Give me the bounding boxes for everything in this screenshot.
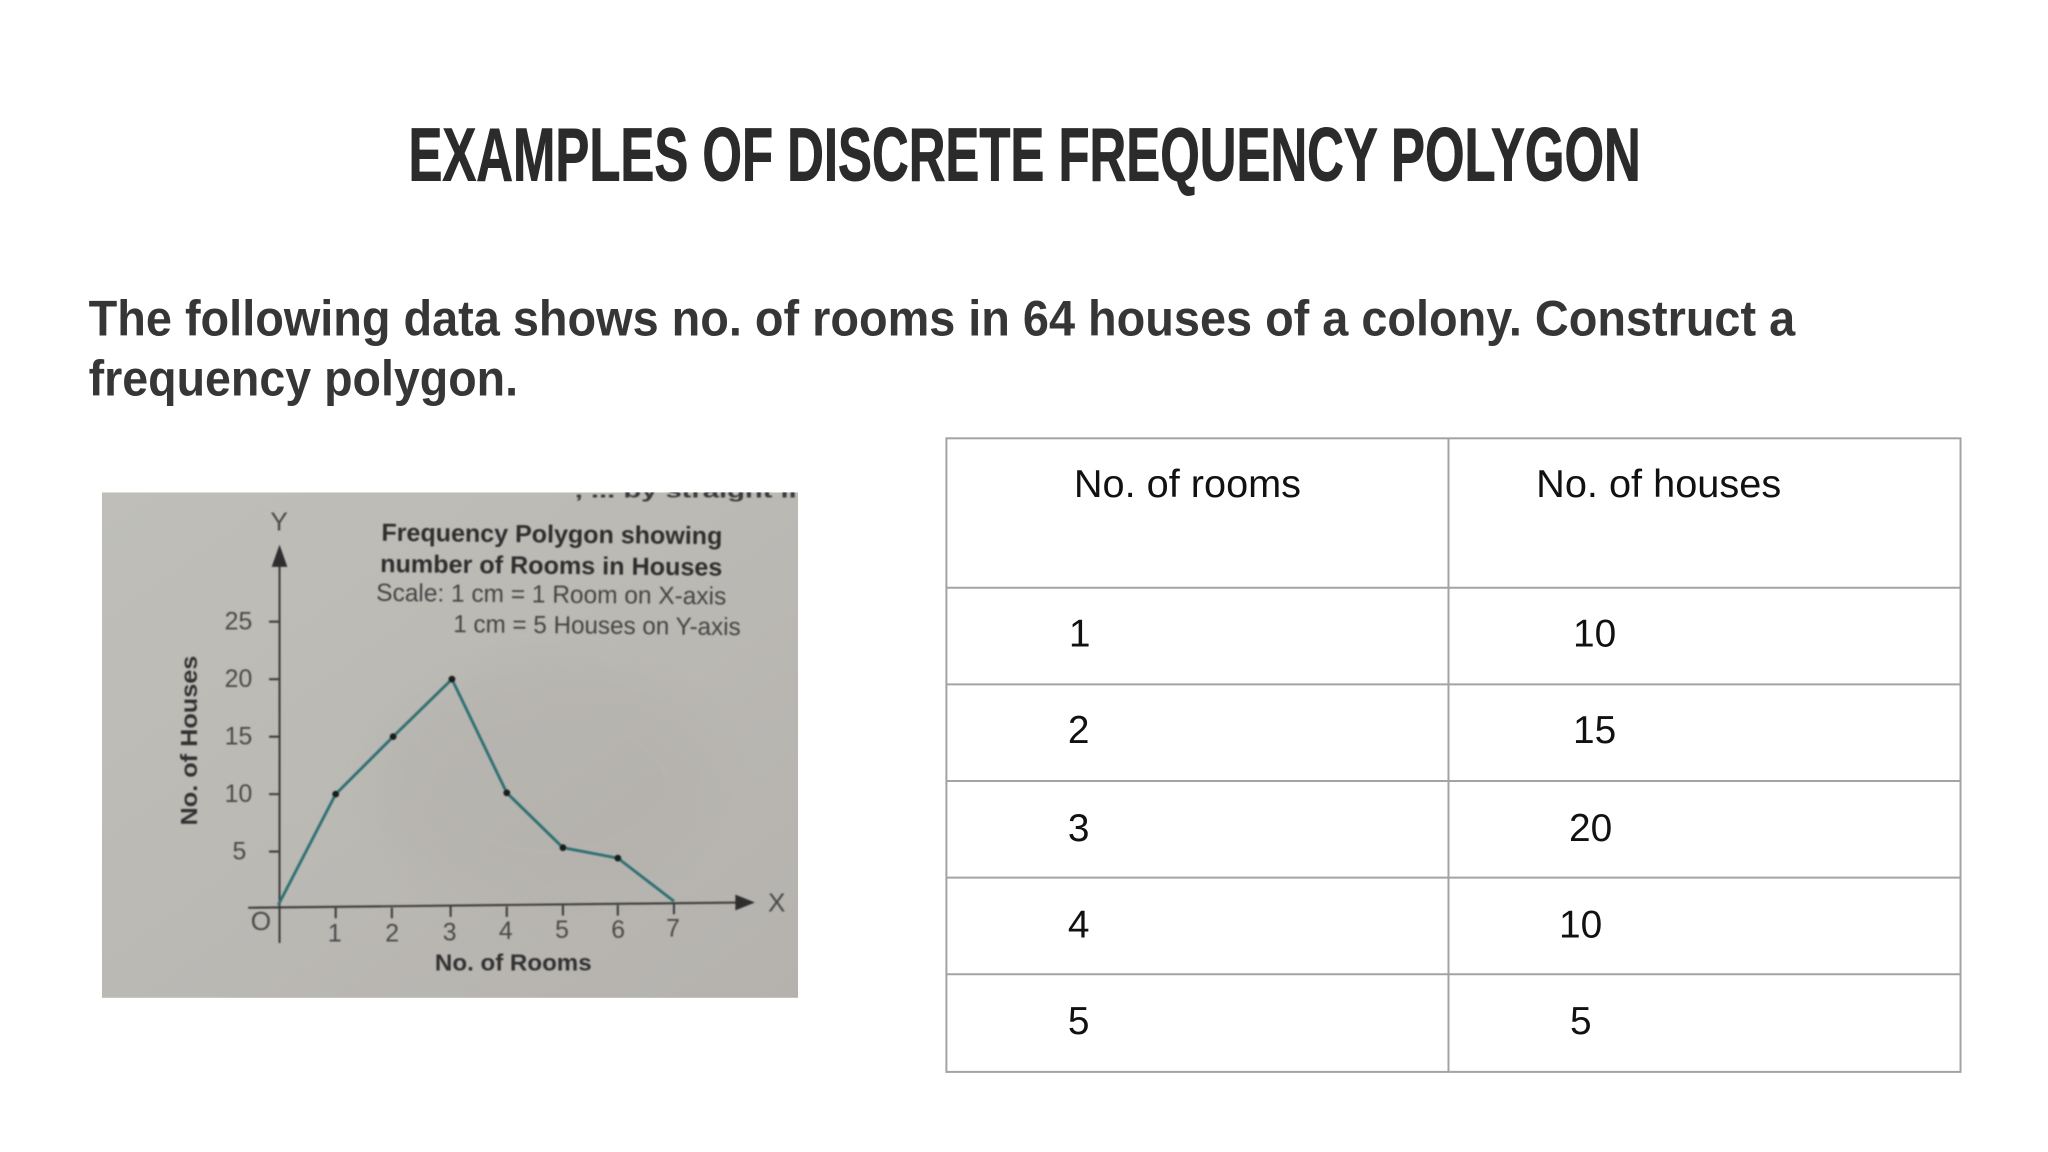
axis tick labels: O bbox=[251, 906, 271, 936]
axis tick labels: 2 bbox=[385, 921, 399, 948]
cut-off text at top of photo: , ... by straight li bbox=[575, 481, 797, 503]
axis tick labels: 3 bbox=[443, 919, 457, 946]
axis tick labels: Y bbox=[270, 506, 288, 536]
polygon line bbox=[278, 679, 674, 905]
table houses column: 5 bbox=[1570, 1000, 1592, 1043]
chart heading bbox=[376, 520, 741, 641]
table houses column bbox=[1559, 613, 1616, 1043]
axis tick labels: 5 bbox=[232, 838, 246, 865]
table rooms column bbox=[1068, 613, 1091, 1043]
chart heading: 1 cm = 5 Houses on Y-axis bbox=[453, 611, 741, 641]
photo: frequency polygon chart: No. of Houses bbox=[176, 656, 202, 825]
chart heading: number of Rooms in Houses bbox=[380, 551, 722, 582]
data table bbox=[946, 438, 1961, 1072]
axis tick labels: 4 bbox=[499, 918, 513, 945]
table houses column: 10 bbox=[1559, 903, 1602, 946]
axis titles: No. of Rooms bbox=[435, 949, 592, 975]
axis tick labels: 6 bbox=[611, 917, 625, 944]
table header row bbox=[1074, 463, 1781, 506]
table header row: No. of rooms bbox=[1074, 463, 1301, 506]
axis arrows bbox=[272, 545, 755, 910]
data points bbox=[332, 676, 621, 862]
table rooms column: 2 bbox=[1068, 709, 1090, 752]
question text bbox=[89, 291, 1796, 406]
table houses column: 10 bbox=[1573, 613, 1616, 656]
table header row: No. of houses bbox=[1536, 463, 1781, 506]
axes bbox=[248, 559, 739, 943]
table rooms column: 5 bbox=[1068, 1000, 1090, 1043]
axis tick labels: 25 bbox=[225, 609, 252, 636]
table houses column: 15 bbox=[1573, 709, 1616, 752]
question text: The following data shows no. of rooms in 64 houses of a colony. Construct a bbox=[89, 291, 1796, 347]
photo: frequency polygon chart bbox=[102, 481, 798, 998]
axis tick labels: 7 bbox=[666, 915, 680, 942]
question text: frequency polygon. bbox=[89, 350, 518, 406]
axis tick labels: 20 bbox=[225, 666, 252, 693]
axis tick labels bbox=[225, 506, 785, 948]
table rooms column: 3 bbox=[1068, 807, 1090, 850]
slide bbox=[89, 127, 1962, 1073]
chart heading: Frequency Polygon showing bbox=[381, 520, 722, 550]
chart heading: Scale: 1 cm = 1 Room on X-axis bbox=[376, 580, 726, 610]
axis tick labels: 10 bbox=[225, 781, 252, 808]
table rooms column: 4 bbox=[1068, 903, 1090, 946]
axis tick labels: 1 bbox=[328, 921, 342, 948]
table rooms column: 1 bbox=[1069, 613, 1091, 656]
table grid bbox=[946, 438, 1961, 1072]
axis tick labels: 15 bbox=[225, 723, 252, 750]
table houses column: 20 bbox=[1569, 807, 1612, 850]
axis tick labels: X bbox=[768, 888, 785, 918]
axis tick labels: 5 bbox=[555, 917, 569, 944]
